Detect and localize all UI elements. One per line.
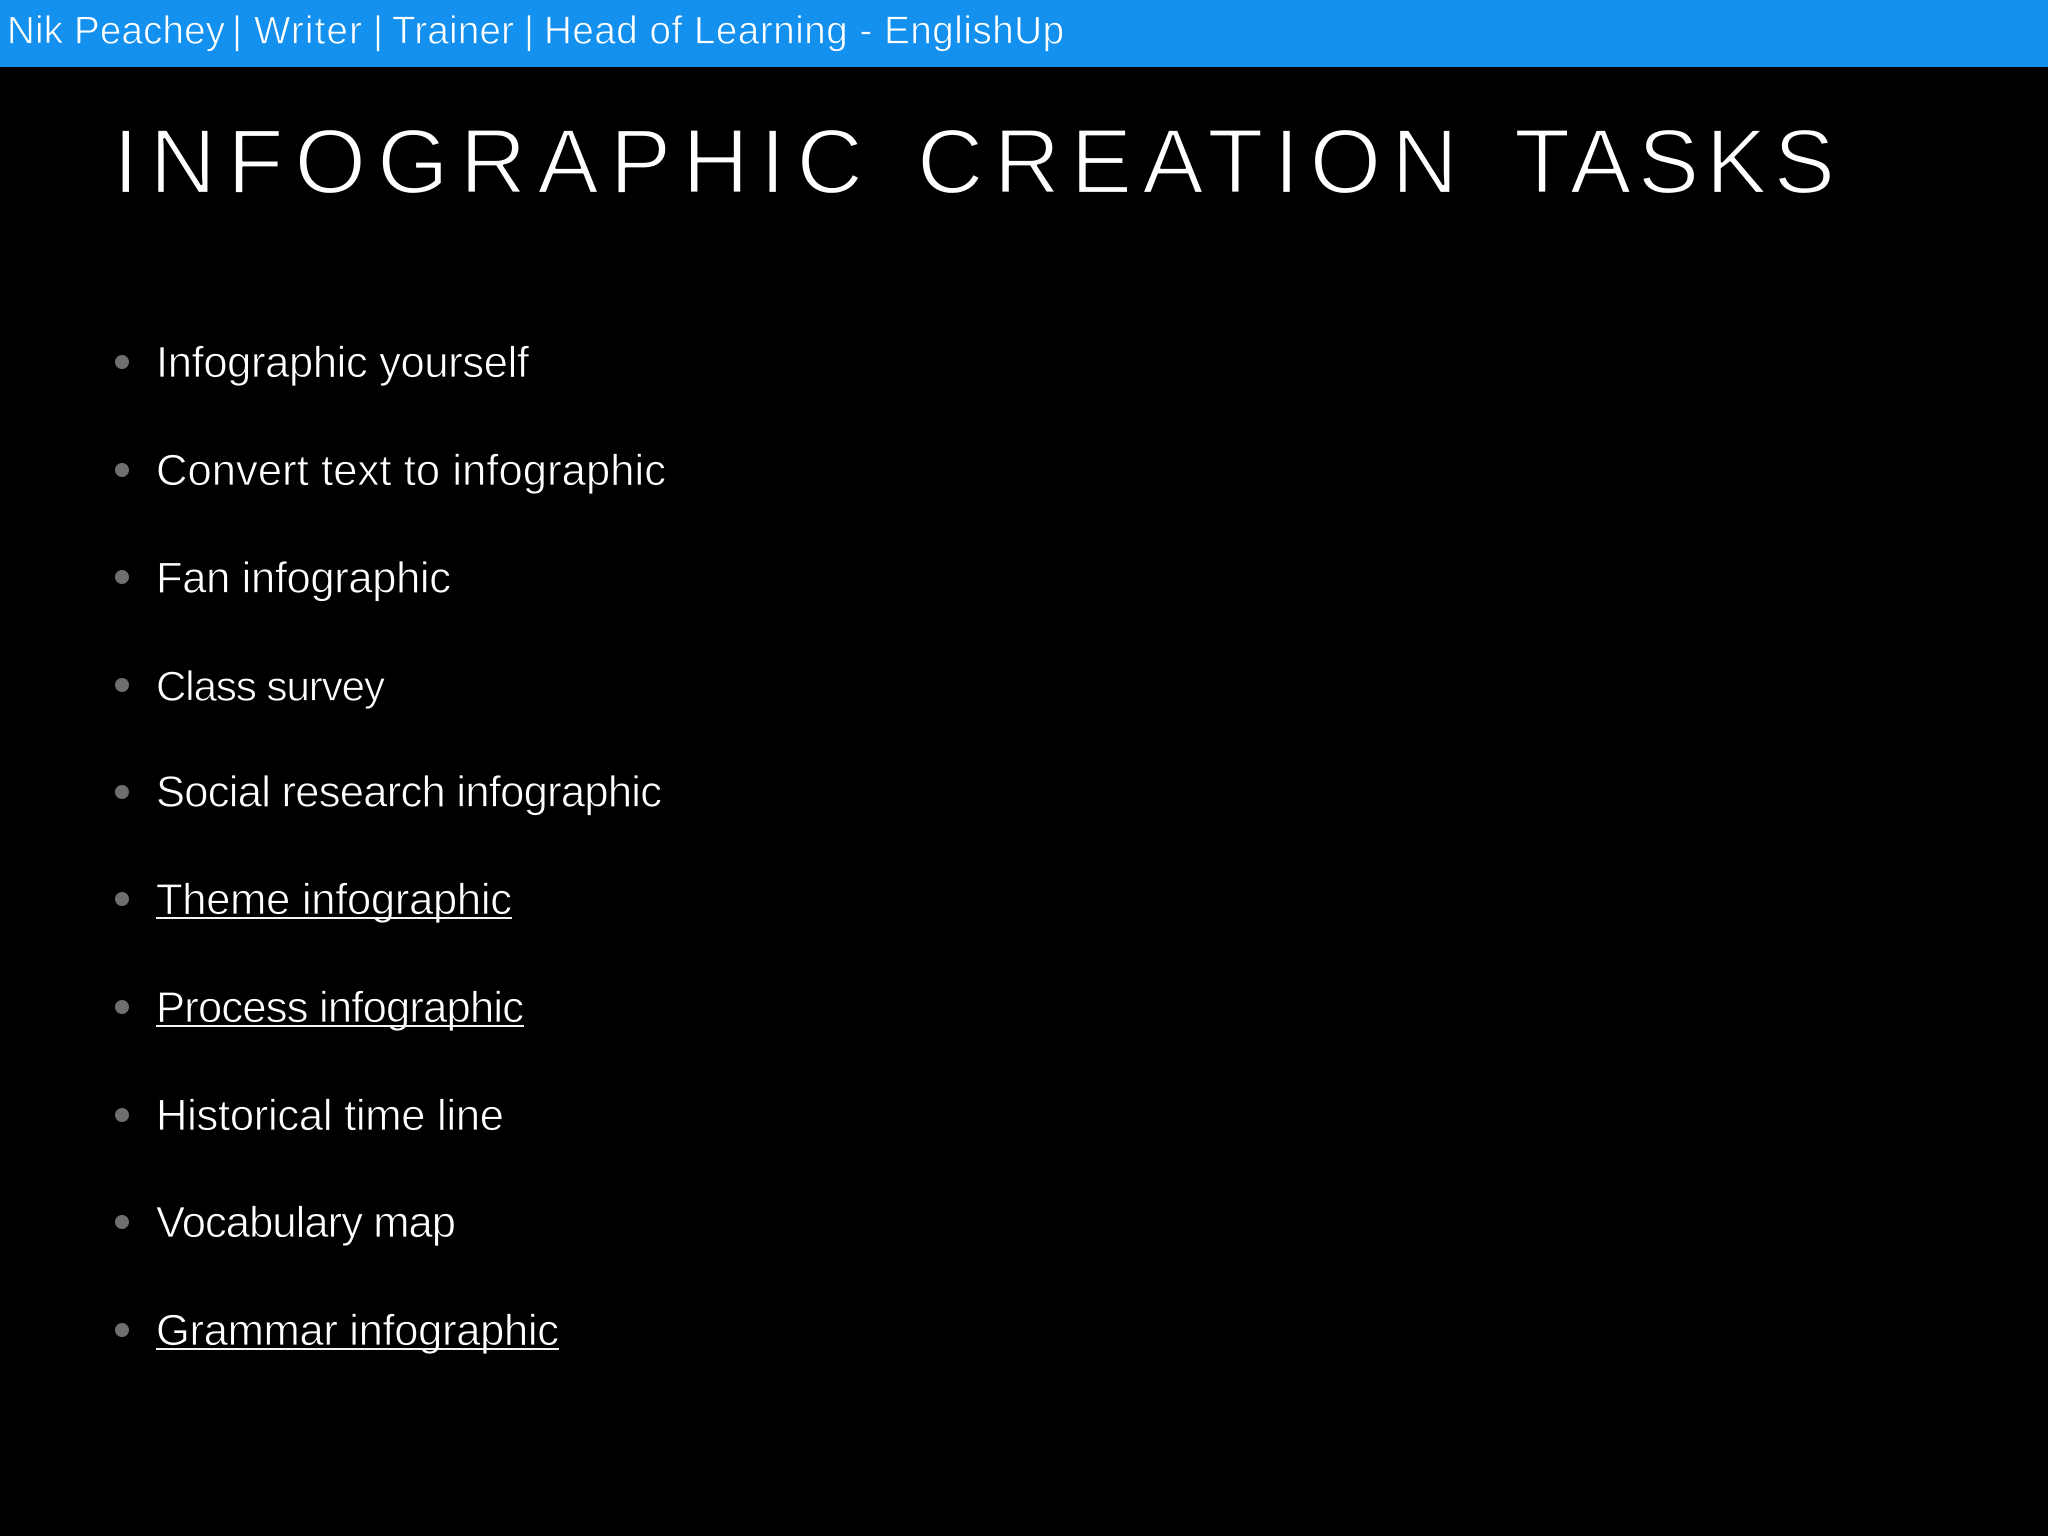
header text: | <box>373 10 383 52</box>
header text <box>7 10 1064 52</box>
list item: Convert text to infographic: Convert text to infographic <box>156 447 666 495</box>
title: INFOGRAPHIC <box>113 111 863 213</box>
header bar <box>0 0 2048 67</box>
list item: Grammar infographic (underlined): Grammar infographic <box>156 1307 559 1355</box>
list item: Class survey: Class survey <box>156 662 385 710</box>
header text: Head of Learning - EnglishUp <box>544 10 1064 52</box>
list item: Theme infographic (underlined): Theme infographic <box>156 876 512 924</box>
title: CREATION <box>917 111 1458 213</box>
header text: Trainer <box>392 10 514 52</box>
list item: Vocabulary map: Vocabulary map <box>156 1199 456 1247</box>
title <box>113 111 1835 213</box>
header text: | <box>524 10 534 52</box>
list item: Infographic yourself: Infographic yourself <box>156 339 530 387</box>
header text: Writer <box>254 10 362 52</box>
list item: Fan infographic: Fan infographic <box>156 554 451 602</box>
list item: Process infographic (underlined): Process infographic <box>156 984 524 1032</box>
header text: | <box>232 10 242 52</box>
list item: Social research infographic: Social research infographic <box>156 768 662 816</box>
bullet list <box>115 339 666 1355</box>
list item: Historical time line: Historical time line <box>156 1092 504 1140</box>
title: TASKS <box>1514 111 1835 213</box>
header text: Nik Peachey <box>7 10 226 52</box>
